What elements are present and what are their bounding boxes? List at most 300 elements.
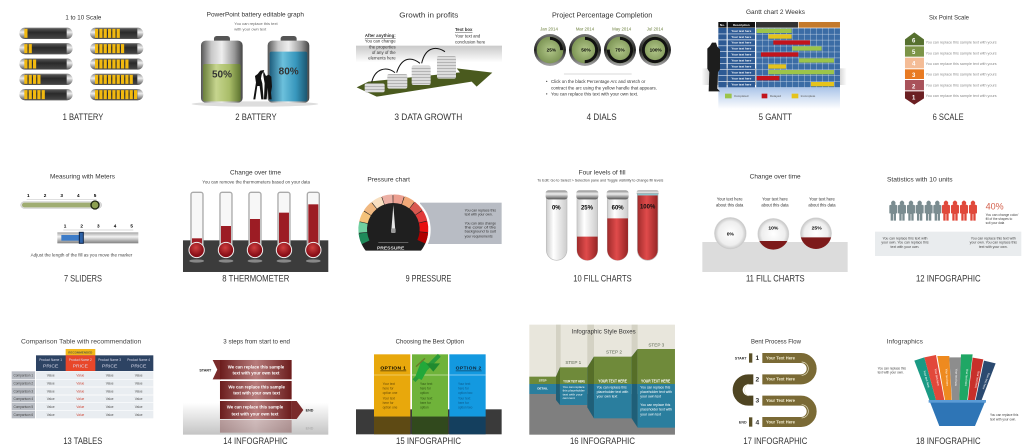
step 3 box: placeholder text with bbox=[640, 408, 672, 412]
comparison rows: Value bbox=[47, 413, 55, 417]
step text bbox=[766, 355, 796, 424]
step band 1 bbox=[220, 360, 292, 379]
note text: with your own text bbox=[234, 27, 267, 32]
reflection: END bbox=[306, 426, 314, 430]
blue option column: option two bbox=[458, 391, 473, 395]
yellow option column: Your text bbox=[383, 382, 395, 386]
left note bbox=[878, 366, 906, 375]
gantt bars bbox=[757, 29, 834, 86]
40% callout: fill of the shapes to bbox=[986, 217, 1012, 221]
header row: Product Name 2 bbox=[69, 358, 92, 362]
green option column: Your text bbox=[420, 396, 432, 400]
fan blades: Your text here bbox=[954, 369, 959, 387]
captions: about this data bbox=[808, 202, 836, 207]
left note: your own. You can replace this bbox=[881, 240, 929, 244]
six segment hexagon scale: 4 bbox=[912, 62, 916, 68]
panel: 2 battery bbox=[192, 12, 318, 122]
left note: text with your own. bbox=[891, 245, 919, 249]
right note: your own. You can replace this bbox=[970, 240, 1017, 244]
starting step: STEP bbox=[539, 379, 547, 383]
panel: 16 infographic bbox=[529, 325, 675, 446]
instructions bbox=[546, 79, 657, 96]
step 2 box: YOUR TEXT HERE bbox=[598, 378, 627, 383]
yellow option column: OPTION 1 bbox=[380, 366, 406, 372]
step 3 box: STEP 3 bbox=[648, 342, 665, 347]
40% callout: You can change color/ bbox=[986, 213, 1018, 217]
green slider: 3 bbox=[60, 193, 63, 198]
box text: the color of the bbox=[465, 225, 496, 229]
left note bbox=[881, 236, 929, 249]
icon: two people high five bbox=[253, 70, 272, 99]
label: 3 DATA GROWTH bbox=[394, 112, 462, 122]
label: 4 DIALS bbox=[587, 112, 617, 122]
40% callout bbox=[986, 201, 1018, 225]
title: Growth in profits bbox=[399, 10, 459, 19]
legend: Incomplete bbox=[801, 94, 816, 98]
title: Pressure chart bbox=[367, 176, 410, 183]
comparison rows: Value bbox=[106, 405, 114, 409]
step 1 box: YOUR TEXT HERE bbox=[563, 378, 585, 383]
table reflection bbox=[718, 87, 840, 109]
right note bbox=[990, 413, 1019, 421]
comparison rows: Value bbox=[76, 413, 84, 417]
label: 7 SLIDERS bbox=[64, 274, 102, 284]
date labels: Jan 2014 bbox=[540, 27, 558, 32]
blue option column: here for bbox=[458, 386, 469, 390]
text: text box: Text box bbox=[455, 27, 473, 32]
date labels: Mar 2014 bbox=[576, 27, 595, 32]
right note: You can replace this bbox=[990, 413, 1019, 417]
comparison rows: Value bbox=[76, 389, 84, 393]
right note: You can replace this text with bbox=[971, 236, 1016, 240]
date labels: May 2014 bbox=[612, 27, 632, 32]
sphere 10% bbox=[758, 218, 789, 250]
gantt table: Your text here bbox=[731, 59, 752, 63]
comparison rows: Comparison 1 bbox=[14, 374, 33, 378]
comparison rows: Value bbox=[47, 405, 55, 409]
blue funnel bbox=[929, 400, 986, 426]
blue slider: 5 bbox=[130, 224, 133, 229]
blue slider bbox=[57, 224, 138, 243]
fan blades: Your text here bbox=[922, 370, 931, 388]
gray backdrop band bbox=[356, 46, 502, 62]
start arrow bbox=[213, 360, 221, 379]
divider bbox=[564, 73, 632, 75]
gray floor bbox=[183, 403, 328, 435]
comparison rows: Value bbox=[135, 381, 143, 385]
title: Gantt chart 2 Weeks bbox=[746, 9, 805, 16]
six segment hexagon scale bbox=[905, 32, 924, 105]
header row: PRICE bbox=[131, 364, 147, 370]
captions: Your text here bbox=[762, 196, 789, 201]
panel: 15 infographic bbox=[356, 338, 502, 446]
note text bbox=[234, 21, 278, 32]
comparison rows: Comparison 5 bbox=[14, 405, 33, 409]
comparison rows: Value bbox=[135, 389, 143, 393]
yellow option column: here for bbox=[383, 386, 394, 390]
gray floor bbox=[529, 394, 675, 435]
gantt table: Your text here bbox=[731, 53, 752, 57]
panel: 13 tables bbox=[12, 338, 153, 446]
comparison rows: Value bbox=[106, 413, 114, 417]
comparison rows: Value bbox=[47, 397, 55, 401]
reflection bbox=[220, 420, 314, 433]
shadow bbox=[192, 101, 318, 107]
step 2 box: You can replace this bbox=[597, 385, 627, 389]
title: 1 to 10 Scale bbox=[65, 15, 102, 22]
gantt table: Your text here bbox=[731, 82, 752, 86]
gantt table: Your text here bbox=[731, 41, 752, 45]
box text bbox=[465, 208, 496, 238]
title: Change over time bbox=[230, 170, 282, 176]
blue option column bbox=[449, 354, 486, 434]
text: after anything: the properties bbox=[369, 44, 396, 49]
step 3 box: YOUR TEXT HERE bbox=[641, 378, 670, 383]
legend: Completed bbox=[734, 94, 749, 98]
text: text box: conclusion here bbox=[455, 39, 486, 44]
comparison rows: Value bbox=[76, 397, 84, 401]
yellow option column: option one bbox=[383, 406, 398, 410]
tube 60%: 60% bbox=[612, 206, 624, 212]
step text: Your Text Here bbox=[766, 398, 796, 403]
dial 50%: 50% bbox=[581, 48, 591, 53]
step text: Your Text Here bbox=[766, 377, 796, 382]
flow direction arrows bbox=[745, 362, 808, 418]
blue option column: here for bbox=[458, 401, 469, 405]
title: 3 steps from start to end bbox=[223, 338, 290, 345]
scale descriptions: You can replace this sample text with yours bbox=[926, 51, 997, 55]
blue battery 80%: 80% bbox=[279, 66, 299, 77]
six segment hexagon scale: 2 bbox=[912, 84, 916, 90]
blue slider: 3 bbox=[97, 224, 100, 229]
title: Choosing the Best Option bbox=[396, 338, 464, 345]
step band 1: text with your own text bbox=[233, 371, 280, 376]
title: Infographic Style Boxes bbox=[572, 329, 636, 336]
green slider: 5 bbox=[94, 193, 97, 198]
date labels: Jul 2014 bbox=[647, 27, 664, 32]
step 2 box bbox=[587, 350, 632, 418]
gantt table: Description bbox=[733, 23, 750, 27]
green battery 50%: 50% bbox=[212, 70, 232, 81]
gantt table: No. bbox=[720, 23, 725, 27]
yellow option column: option one bbox=[383, 391, 398, 395]
left note: You can replace this text with bbox=[882, 236, 928, 240]
blue option column: OPTION 2 bbox=[456, 366, 482, 372]
green option column: Your text bbox=[420, 382, 432, 386]
label: 13 TABLES bbox=[63, 436, 102, 446]
box text: your requirements bbox=[465, 234, 493, 238]
box text: background to suit bbox=[465, 230, 496, 234]
thermometer 2 bbox=[218, 192, 234, 263]
comparison rows bbox=[12, 371, 153, 418]
comparison rows: Value bbox=[76, 405, 84, 409]
label: 8 THERMOMETER bbox=[222, 274, 290, 284]
captions: about this data bbox=[716, 202, 744, 207]
captions: Your text here bbox=[717, 196, 743, 201]
panel: 8 thermometer bbox=[183, 170, 328, 284]
panel: 17 infographic bbox=[735, 338, 812, 446]
header row: Product Name 1 bbox=[39, 358, 62, 362]
green option column bbox=[412, 354, 448, 434]
panel: 4 dials bbox=[534, 12, 671, 122]
tube 25%: 25% bbox=[581, 206, 594, 212]
step band 2: text with your own text bbox=[233, 391, 281, 396]
panel: 6 scale bbox=[905, 15, 997, 122]
title: Bent Process Flow bbox=[751, 338, 801, 345]
step 3 box: your own text bbox=[640, 412, 661, 416]
olive arrow bbox=[357, 68, 492, 97]
label: 12 INFOGRAPHIC bbox=[916, 274, 981, 284]
title: Measuring with Meters bbox=[50, 175, 115, 181]
sphere 0%: 0% bbox=[727, 232, 734, 238]
step 1 box: You can replace bbox=[563, 385, 585, 389]
backdrop bbox=[529, 325, 675, 435]
header row: Product Name 4 bbox=[127, 358, 150, 362]
blue option column: Your text bbox=[458, 396, 470, 400]
step band 2: We can replace this sample bbox=[228, 384, 285, 389]
comparison rows: Value bbox=[106, 397, 114, 401]
panel: 7 sliders bbox=[21, 175, 138, 284]
green option column: option bbox=[420, 406, 429, 410]
panel: 10 fill charts bbox=[537, 171, 664, 284]
sphere 0% bbox=[714, 217, 746, 249]
legend: Delayed bbox=[770, 94, 781, 98]
instructions: • bbox=[546, 91, 548, 96]
icon: bamboo leaves bbox=[414, 355, 440, 381]
comparison rows: Value bbox=[106, 374, 114, 378]
side backdrop bbox=[702, 68, 847, 85]
legend bbox=[725, 94, 816, 98]
right note: text with your own. bbox=[990, 417, 1016, 421]
panel: 3 data growth bbox=[356, 10, 502, 122]
comparison rows: Value bbox=[47, 374, 55, 378]
dial 75%: 75% bbox=[615, 48, 625, 53]
text: text box bbox=[455, 27, 486, 44]
end marker: END bbox=[739, 420, 747, 424]
title: PowerPoint battery editable graph bbox=[207, 12, 304, 19]
yellow option column: Your text bbox=[383, 396, 395, 400]
step numbers: 1 bbox=[755, 355, 759, 362]
green slider: 2 bbox=[44, 193, 47, 198]
text: after anything: After anything: bbox=[365, 33, 396, 38]
panel: 1 battery bbox=[19, 15, 143, 122]
gray floor bbox=[702, 242, 848, 272]
icon: man silhouette bbox=[707, 43, 720, 91]
step band 1: We can replace this sample bbox=[228, 364, 285, 369]
start marker: START bbox=[735, 356, 747, 360]
fan blades: Your text here bbox=[964, 369, 969, 387]
panel: 5 gantt bbox=[702, 9, 847, 122]
step 1 box: this placeholder bbox=[563, 389, 585, 393]
gantt table: Your text here bbox=[731, 29, 752, 33]
title: Statistics with 10 units bbox=[887, 176, 953, 183]
thermometer 3 bbox=[247, 192, 263, 263]
end label: END bbox=[306, 408, 314, 412]
text: after anything: elements here bbox=[368, 56, 396, 61]
header row: PRICE bbox=[43, 364, 59, 370]
green slider: 4 bbox=[77, 193, 80, 198]
step band 3: We can replace this sample bbox=[227, 405, 284, 410]
captions: Your text here bbox=[809, 196, 836, 201]
scale descriptions: You can replace this sample text with yours bbox=[926, 41, 997, 45]
label: 10 FILL CHARTS bbox=[573, 274, 632, 284]
header row: Product Name 3 bbox=[98, 358, 121, 362]
panel: 14 infographic bbox=[183, 338, 328, 446]
gray text box bbox=[420, 203, 502, 244]
gantt table bbox=[718, 22, 840, 87]
six segment hexagon scale: 3 bbox=[912, 73, 916, 79]
blue option column: Your text bbox=[458, 382, 470, 386]
six segment hexagon scale: 6 bbox=[912, 39, 916, 45]
fan blades: Your text here bbox=[933, 368, 941, 387]
recommendation tag: RECOMMENDED bbox=[68, 351, 93, 355]
blue slider: 4 bbox=[114, 224, 117, 229]
panel: 12 infographic bbox=[875, 176, 1021, 284]
step 1 box: STEP 1 bbox=[565, 360, 582, 365]
six segment hexagon scale: 1 bbox=[912, 96, 916, 102]
thermometer 4 bbox=[276, 192, 292, 263]
step numbers bbox=[755, 355, 759, 427]
left note: text with your own. bbox=[878, 371, 904, 375]
people pictogram bbox=[889, 201, 977, 221]
coin stacks bbox=[365, 56, 456, 92]
step 3 box: your own text bbox=[640, 395, 661, 399]
dial 100%: 100% bbox=[650, 48, 662, 53]
comparison rows: Value bbox=[135, 374, 143, 378]
dark base band bbox=[183, 240, 328, 272]
sphere 25% bbox=[800, 218, 832, 249]
right note: text with your own. bbox=[979, 245, 1008, 249]
fan blades: Your text here bbox=[945, 368, 949, 387]
yellow option column: here for bbox=[383, 401, 394, 405]
title: Infographics bbox=[887, 338, 923, 345]
note text: You can replace this text bbox=[234, 21, 278, 26]
instructions: • bbox=[546, 79, 548, 84]
comparison rows: Comparison 2 bbox=[14, 381, 33, 385]
step band 3 bbox=[220, 401, 292, 419]
title: Project Percentage Completion bbox=[552, 12, 652, 19]
starting step bbox=[529, 377, 556, 394]
thermometer 1 bbox=[189, 192, 204, 263]
instructions: contract the arc using the yellow handle that appears. bbox=[551, 85, 657, 90]
text: after anything: You can change bbox=[365, 39, 396, 44]
sphere 10%: 10% bbox=[768, 226, 779, 232]
scale descriptions: You can replace this sample text with yours bbox=[926, 83, 997, 87]
instructions: Click on the black Percentage Arc and stretch or bbox=[551, 79, 646, 84]
step 3 box: placeholder text with bbox=[640, 390, 672, 394]
scale descriptions bbox=[926, 41, 997, 98]
step 1 box bbox=[556, 360, 587, 405]
comparison rows: Value bbox=[47, 381, 55, 385]
gauge bbox=[350, 186, 436, 272]
sphere 25%: 25% bbox=[812, 226, 822, 232]
instructions: You can replace this text with your own text. bbox=[551, 91, 638, 96]
step text: Your Text Here bbox=[766, 419, 796, 424]
six segment hexagon scale: 5 bbox=[912, 50, 916, 56]
gantt table: Your text here bbox=[731, 65, 752, 69]
start label: START bbox=[199, 368, 212, 372]
comparison rows: Value bbox=[135, 413, 143, 417]
growth arcs bbox=[372, 48, 445, 82]
blue slider: 1 bbox=[64, 224, 67, 229]
comparison rows: Value bbox=[76, 381, 84, 385]
left note: You can replace this bbox=[878, 366, 906, 370]
gantt table: Your text here bbox=[731, 76, 752, 80]
scale descriptions: You can replace this sample text with yours bbox=[926, 62, 997, 66]
step 2 box: placeholder text with bbox=[597, 390, 628, 394]
recommendation tag bbox=[66, 349, 95, 355]
title: Change over time bbox=[750, 175, 801, 181]
captions bbox=[716, 196, 836, 207]
comparison rows: Comparison 6 bbox=[14, 413, 33, 417]
fan blades: Your text here bbox=[981, 372, 991, 390]
label: 17 INFOGRAPHIC bbox=[743, 436, 808, 446]
label: 11 FILL CHARTS bbox=[746, 274, 805, 284]
subtitle: You can remove the thermometers based on your data bbox=[202, 179, 311, 184]
green option column: option bbox=[420, 391, 429, 395]
step band 2 bbox=[220, 381, 292, 399]
header row bbox=[36, 355, 153, 371]
dial 25%: 25% bbox=[547, 48, 557, 53]
box text: text with your own. bbox=[465, 212, 493, 216]
panel: 11 fill charts bbox=[702, 175, 848, 284]
thermometer 5 bbox=[306, 192, 321, 263]
step 2 box: STEP 2 bbox=[606, 350, 622, 355]
text: text box: Your text and bbox=[455, 33, 481, 38]
green option column: here for bbox=[420, 386, 431, 390]
header row: PRICE bbox=[73, 364, 89, 370]
panel: 9 pressure bbox=[350, 176, 502, 284]
comparison rows: Comparison 4 bbox=[14, 397, 33, 401]
label: 15 INFOGRAPHIC bbox=[396, 436, 461, 446]
comparison rows: Comparison 3 bbox=[14, 389, 33, 393]
green slider bbox=[21, 193, 102, 209]
tube 100%: 100% bbox=[640, 205, 656, 211]
right note bbox=[970, 236, 1017, 249]
header row: PRICE bbox=[102, 364, 118, 370]
label: 18 INFOGRAPHIC bbox=[916, 436, 981, 446]
40% callout: suit your data bbox=[986, 221, 1004, 225]
wall pillars bbox=[556, 325, 638, 378]
end arrow bbox=[292, 401, 303, 419]
yellow option column bbox=[374, 354, 410, 434]
title: Six Point Scale bbox=[929, 15, 969, 22]
step 3 box: You can replace this bbox=[640, 403, 671, 407]
step numbers: 3 bbox=[755, 398, 759, 405]
subtitle: To Edit: Go to Select > Selection pane and Toggle visibility to change fill levels bbox=[537, 179, 664, 183]
step band 3: text with your own text bbox=[232, 411, 279, 416]
title: Comparison Table with recommendation bbox=[21, 338, 142, 345]
label: 6 SCALE bbox=[933, 112, 964, 122]
gantt table: Your text here bbox=[731, 70, 752, 74]
step text: Your Text Here bbox=[766, 355, 796, 360]
step numbers: 2 bbox=[755, 377, 759, 384]
step 3 box bbox=[632, 342, 675, 428]
step 1 box: own text bbox=[563, 396, 575, 400]
scale descriptions: You can replace this sample text with yours bbox=[926, 94, 997, 98]
panel: 18 infographic bbox=[878, 338, 1019, 446]
comparison rows: Value bbox=[106, 381, 114, 385]
title: Four levels of fill bbox=[579, 171, 626, 177]
gantt table: Your text here bbox=[731, 47, 752, 51]
tube 0%: 0% bbox=[552, 206, 561, 212]
date labels bbox=[540, 27, 664, 32]
gauge: PRESSURE bbox=[377, 245, 405, 251]
green option column: here for bbox=[420, 401, 431, 405]
label: 2 BATTERY bbox=[235, 112, 277, 122]
step 3 box: You can replace this bbox=[640, 385, 671, 389]
fan blades bbox=[914, 354, 996, 400]
